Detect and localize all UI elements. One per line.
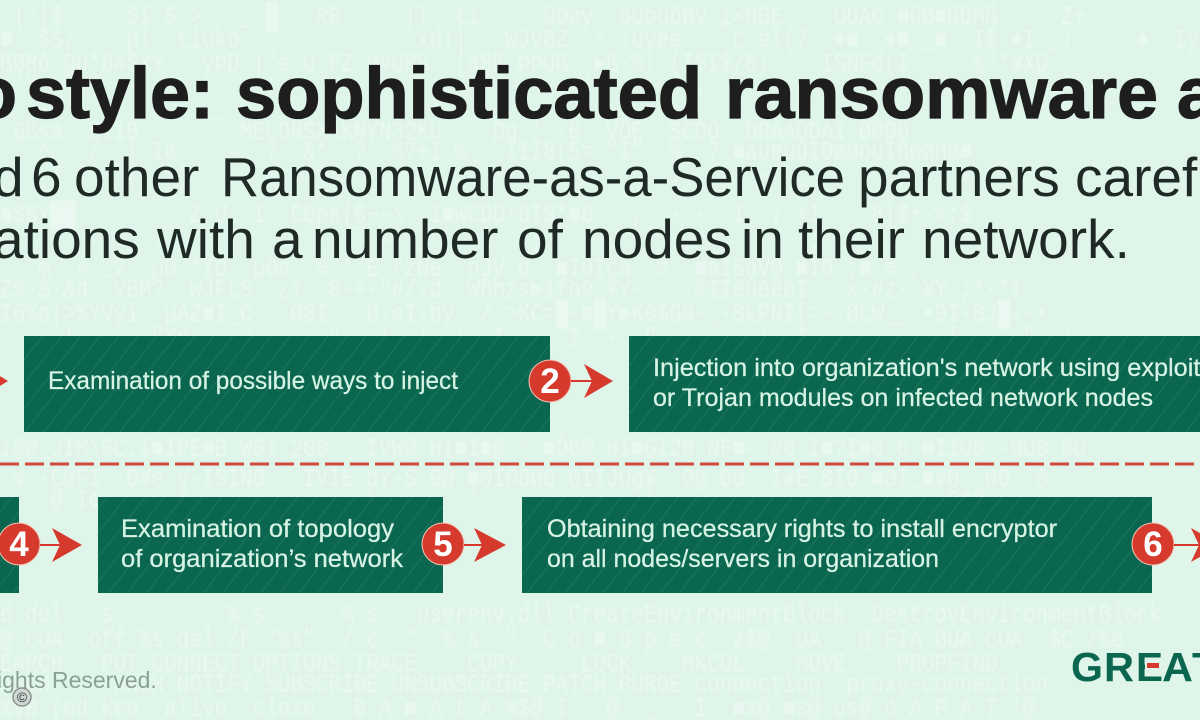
arrow: step 2	[571, 364, 613, 398]
background code texture: ATCH ARCH NOTIFY SUBSCRIBE UNSUBSCRIBE PATCH PURGE connection proxy-connection	[0, 671, 1048, 701]
subtitle: Ransomware-as-a-Service	[221, 146, 845, 208]
arrow: step 4	[40, 528, 82, 562]
subtitle: network.	[922, 208, 1130, 270]
title: ransomware	[725, 54, 1158, 134]
badge 4: 4	[9, 525, 29, 564]
background code texture: ßØ8ô DU*8#$XY ÿÞD |"e U FZ V#URS ¦a8ß ÞÞUß ►ß-%; (I$I$/8; ISNFd(I %"*¥XD	[0, 50, 1061, 80]
background code texture: i@@_JIM\$C.I■IPE■B W0I 2G0 _ IVW@ HI■I■@ ° ■ÔG@ HI■GI20 NF■- #0 I■?I■0 6 ■IIU0 -0U0 0U	[0, 433, 1086, 465]
subtitle: their	[798, 208, 905, 270]
logo: G	[1071, 644, 1103, 690]
step box: injection into network	[629, 336, 1200, 432]
logo: A	[1162, 644, 1193, 690]
background code texture: ■ $S; pl tiuko xd!| WJVBZ ° :uyëë ¯c el(7 ¯♦■··♦■ _■ ·I$·♦I·_; ♦ ¯Iy	[0, 26, 1200, 56]
background code texture: ¥ ·C@FI ·0¥e V-ISIN0 IVIE dY·S 9@ ■0I08Ø0 0IIJUg¥ 0@ Ø0 I¥E SI0 ■0I ■¥0 ¯00 ¨0	[0, 465, 1048, 495]
step box: examination of ways to inject: Examination of possible ways to inject	[48, 367, 458, 395]
background code texture: "m » 2 µ0 *IO µ0a ≡ * E ²zNe nJV d ■I0Iça ≡ ■aI8aV0 ■I0 ;■ ≡ ,	[0, 255, 922, 285]
badge 4	[0, 523, 40, 565]
background code texture: |"|$ $I $ > _ █ RB |T ti ûDøy 6ÛoûôBV·ï×0B£ ÛÛAC ■ûØ■ßDMß Z+	[0, 1, 1099, 33]
background code texture: EARCH PUT CONNECT OPTIONS TRACE COPY LOCK MKCOL MOVE PROPFIND	[0, 650, 998, 680]
badge 5	[422, 523, 464, 565]
background code texture: d del s % s % s userenv.dll CreateEnvironmentBlock DestroyEnvironmentBlock	[0, 601, 1162, 631]
subtitle	[0, 146, 1200, 270]
background code texture: '" ¯, ¦· ; · ' -- ,_ T ´ ·. ° ¨ '· ; , ¯ · ` ¨ , ' · ; ¯ ' ·	[0, 73, 1124, 103]
subtitle: other	[74, 146, 199, 208]
subtitle: partners	[858, 146, 1060, 208]
copyright footer: ights Reserved.	[0, 667, 157, 693]
background code texture: Z$-$·&d ¯VBM? WJFLS ¿I 8-+·"#/-d Wñhzs►1fo9 ¥Y· ¨·®IIëûëëëI .x·#z· ¥Y ;*·*I	[0, 276, 1023, 306]
step box: previous step cropped	[0, 497, 19, 593]
background code texture: 6ß<a 5Iî8 ¯¯ MELDRSX\KNYN32KU ¯ Dg ¦ ·6 VŌE SCDO DRAADDAI ØØØØ	[0, 117, 909, 148]
icon: copyright watermark	[13, 688, 31, 706]
badge 2	[529, 360, 571, 402]
step box: obtaining rights	[522, 497, 1152, 593]
badge 2: 2	[540, 362, 560, 401]
badge 5: 5	[433, 525, 453, 564]
icon: copyright watermark: ©	[17, 689, 28, 705]
subtitle: with	[156, 208, 255, 270]
step box: obtaining rights: Obtaining necessary rights to install encryptor	[547, 515, 1057, 543]
logo	[1071, 644, 1200, 690]
background code texture: I6%a|>%YVÿi µAZ■I C. Ø8I Ø.eI-bÿ / >KC=█-■█Y►K0$G0-_·SLPNI[=-·ØLW__ •9I-BJ█--•	[0, 299, 1048, 330]
step box: topology: of organization’s network	[121, 545, 404, 573]
step box: examination of ways to inject	[24, 336, 550, 432]
background code texture: ■$8Y██ Z U I C0pa{6¬-\ I■WCDD+8I$*■8 , ·_· I ;.+I 8|$+-»;$	[0, 200, 972, 231]
subtitle: in	[741, 208, 784, 270]
background code texture: I ¨ ( ) · _ ; * - _ · , ¯ ; · - _ · ' , · ¯	[0, 162, 1048, 192]
subtitle: a	[272, 208, 303, 270]
logo: R	[1104, 644, 1134, 690]
background code texture: ´ |. ; "Yp ¯ÿ · " ¦ ' ; I . Ï · " ¯ ´ ; I . · ¨ | . " '	[0, 323, 1073, 354]
dashed divider	[0, 462, 1200, 466]
arrow: incoming to step 1	[0, 364, 8, 398]
arrow: step 6	[1174, 528, 1200, 562]
badge 6: 6	[1143, 525, 1163, 564]
step box: injection into network: or Trojan modules on infected network nodes	[653, 384, 1153, 412]
step box: topology: Examination of topology	[121, 515, 395, 543]
title: style:	[26, 54, 214, 134]
background code texture: @ I¢ . * , · ¯ ; \ ' · , ; ¦ . · , ; · ¯ R¢@	[0, 487, 985, 517]
subtitle: 6	[31, 146, 62, 208]
logo: E	[1136, 644, 1163, 690]
step box: injection into network: Injection into organization's network using exploits	[653, 354, 1200, 382]
background code texture: ´ , · ¯ . ; ¦ · _ ' ¯ - , · ´ ; ¦ . ¯ , ' · ;	[0, 227, 846, 257]
subtitle: nodes	[582, 208, 732, 270]
subtitle: number	[312, 208, 498, 270]
subtitle: of	[517, 208, 564, 270]
title: sophisticated	[236, 54, 702, 134]
background code texture: @ cUA off %s del /F "%s" / c " % s " C o ■ S p e c z$@ UA - @ FIA ØUA cUA $C /%e	[0, 626, 1124, 656]
badge 6	[1132, 523, 1174, 565]
step box: topology	[98, 497, 443, 593]
background code texture: ¯ ^ / |·Ia ` - ? &* ? %?+I %_ I1I8(5=-"I" % ? ■aueuûIDøøouIñøønø■ ¯	[0, 138, 1036, 168]
title	[0, 54, 1200, 134]
arrow: step 5	[464, 528, 506, 562]
step box: obtaining rights: on all nodes/servers in organization	[547, 545, 939, 573]
